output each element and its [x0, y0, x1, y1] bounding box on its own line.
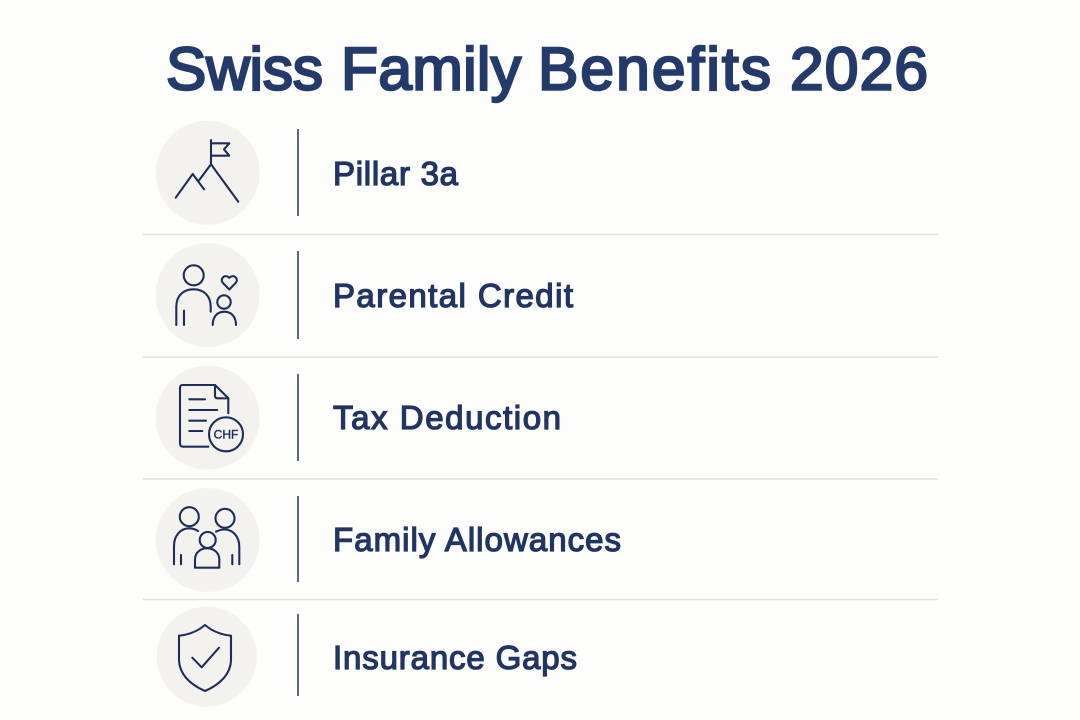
- label: Tax Deduction: Tax Deduction: [333, 399, 561, 436]
- icon: family of three: [174, 507, 239, 568]
- title: 2026: [790, 34, 928, 102]
- row: Insurance Gaps: [157, 607, 577, 707]
- row: Tax Deduction: [156, 366, 561, 470]
- row: Pillar 3a: [156, 121, 459, 225]
- icon: parent and child with heart: [176, 265, 237, 325]
- row: Family Allowances: [156, 488, 621, 592]
- label: Family Allowances: Family Allowances: [333, 521, 621, 558]
- title: [166, 34, 928, 102]
- label: Insurance Gaps: Insurance Gaps: [333, 639, 577, 676]
- icon: document with CHF coin: CHF: [214, 428, 238, 442]
- label: Parental Credit: Parental Credit: [333, 277, 573, 314]
- icon: shield with check: [179, 625, 231, 691]
- row: Parental Credit: [156, 243, 573, 347]
- icon: document with CHF coin: [180, 385, 243, 451]
- title: Swiss: [166, 34, 323, 102]
- title: Family: [341, 34, 522, 102]
- icon: mountain with flag: [176, 140, 238, 202]
- label: Pillar 3a: Pillar 3a: [333, 155, 459, 192]
- title: Benefits: [538, 34, 771, 102]
